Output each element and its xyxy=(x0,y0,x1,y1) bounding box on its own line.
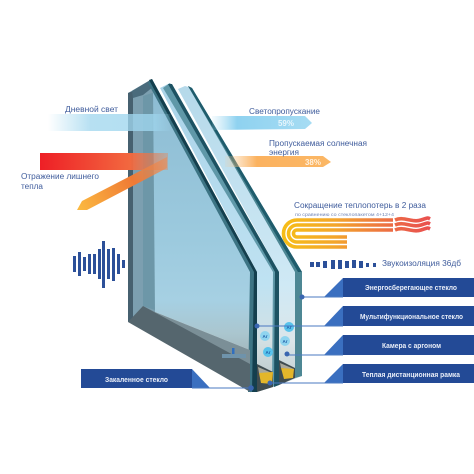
front pane dark edge xyxy=(148,79,257,392)
middle glass pane xyxy=(160,83,279,392)
heading: heat loss: Сокращение теплопотерь в 2 раза xyxy=(294,201,427,210)
heading: solar energy: энергия xyxy=(269,148,299,157)
glass label mark xyxy=(222,348,246,358)
callout: multifunctional glass: Мультифункциональное стекло xyxy=(360,314,463,321)
daylight band over glass xyxy=(48,114,170,131)
heading: sound insulation: Звукоизоляция 36дб xyxy=(382,259,461,268)
callout: energy saving glass xyxy=(300,278,474,300)
heading: solar energy: Пропускаемая солнечная xyxy=(269,139,367,148)
argon markers: Ar xyxy=(262,334,268,339)
heat band xyxy=(40,153,168,170)
argon markers: Ar xyxy=(265,350,271,355)
heading: daylight: Дневной свет xyxy=(65,105,118,114)
heading: heat reflection xyxy=(21,172,100,191)
front frame side xyxy=(128,79,155,322)
heading: light transmission: Светопропускание xyxy=(249,107,321,116)
argon markers xyxy=(260,322,294,357)
callout: tempered glass xyxy=(81,369,254,391)
heading: solar energy xyxy=(269,139,367,157)
38 percent: 38% xyxy=(305,158,321,167)
icon: heat loops xyxy=(284,218,430,247)
solar energy arrow xyxy=(225,156,331,167)
callout: multifunctional glass xyxy=(254,306,474,328)
argon markers: Ar xyxy=(282,339,288,344)
callout: tempered glass: Закаленное стекло xyxy=(105,377,168,384)
icon: sound level bars xyxy=(310,260,376,269)
reflected heat arrow xyxy=(77,157,167,210)
icon: sound wave xyxy=(73,241,125,288)
front glass pane xyxy=(153,88,251,350)
heading: heat reflection: Отражение лишнего xyxy=(21,172,100,181)
heading: heat reflection: тепла xyxy=(21,182,44,191)
callout: argon chamber: Камера с аргоном xyxy=(382,343,441,350)
spacer frames with sealant xyxy=(257,360,295,392)
bottom frame xyxy=(128,306,252,393)
callout: argon chamber xyxy=(284,335,474,356)
59 percent: 59% xyxy=(278,119,294,128)
transmitted light arrow xyxy=(212,116,312,130)
callout: energy saving glass: Энергосберегающее стекло xyxy=(365,284,457,292)
back glass pane xyxy=(178,86,302,385)
window: triple glazing unit xyxy=(128,79,302,393)
callout: warm spacer frame: Теплая дистанционная рамка xyxy=(362,372,460,379)
subheading: heat loss comparison: по сравнению со стеклопакетом 4+12+4 xyxy=(295,212,395,217)
callout: warm spacer frame xyxy=(268,364,474,386)
argon markers: Ar xyxy=(286,325,292,330)
